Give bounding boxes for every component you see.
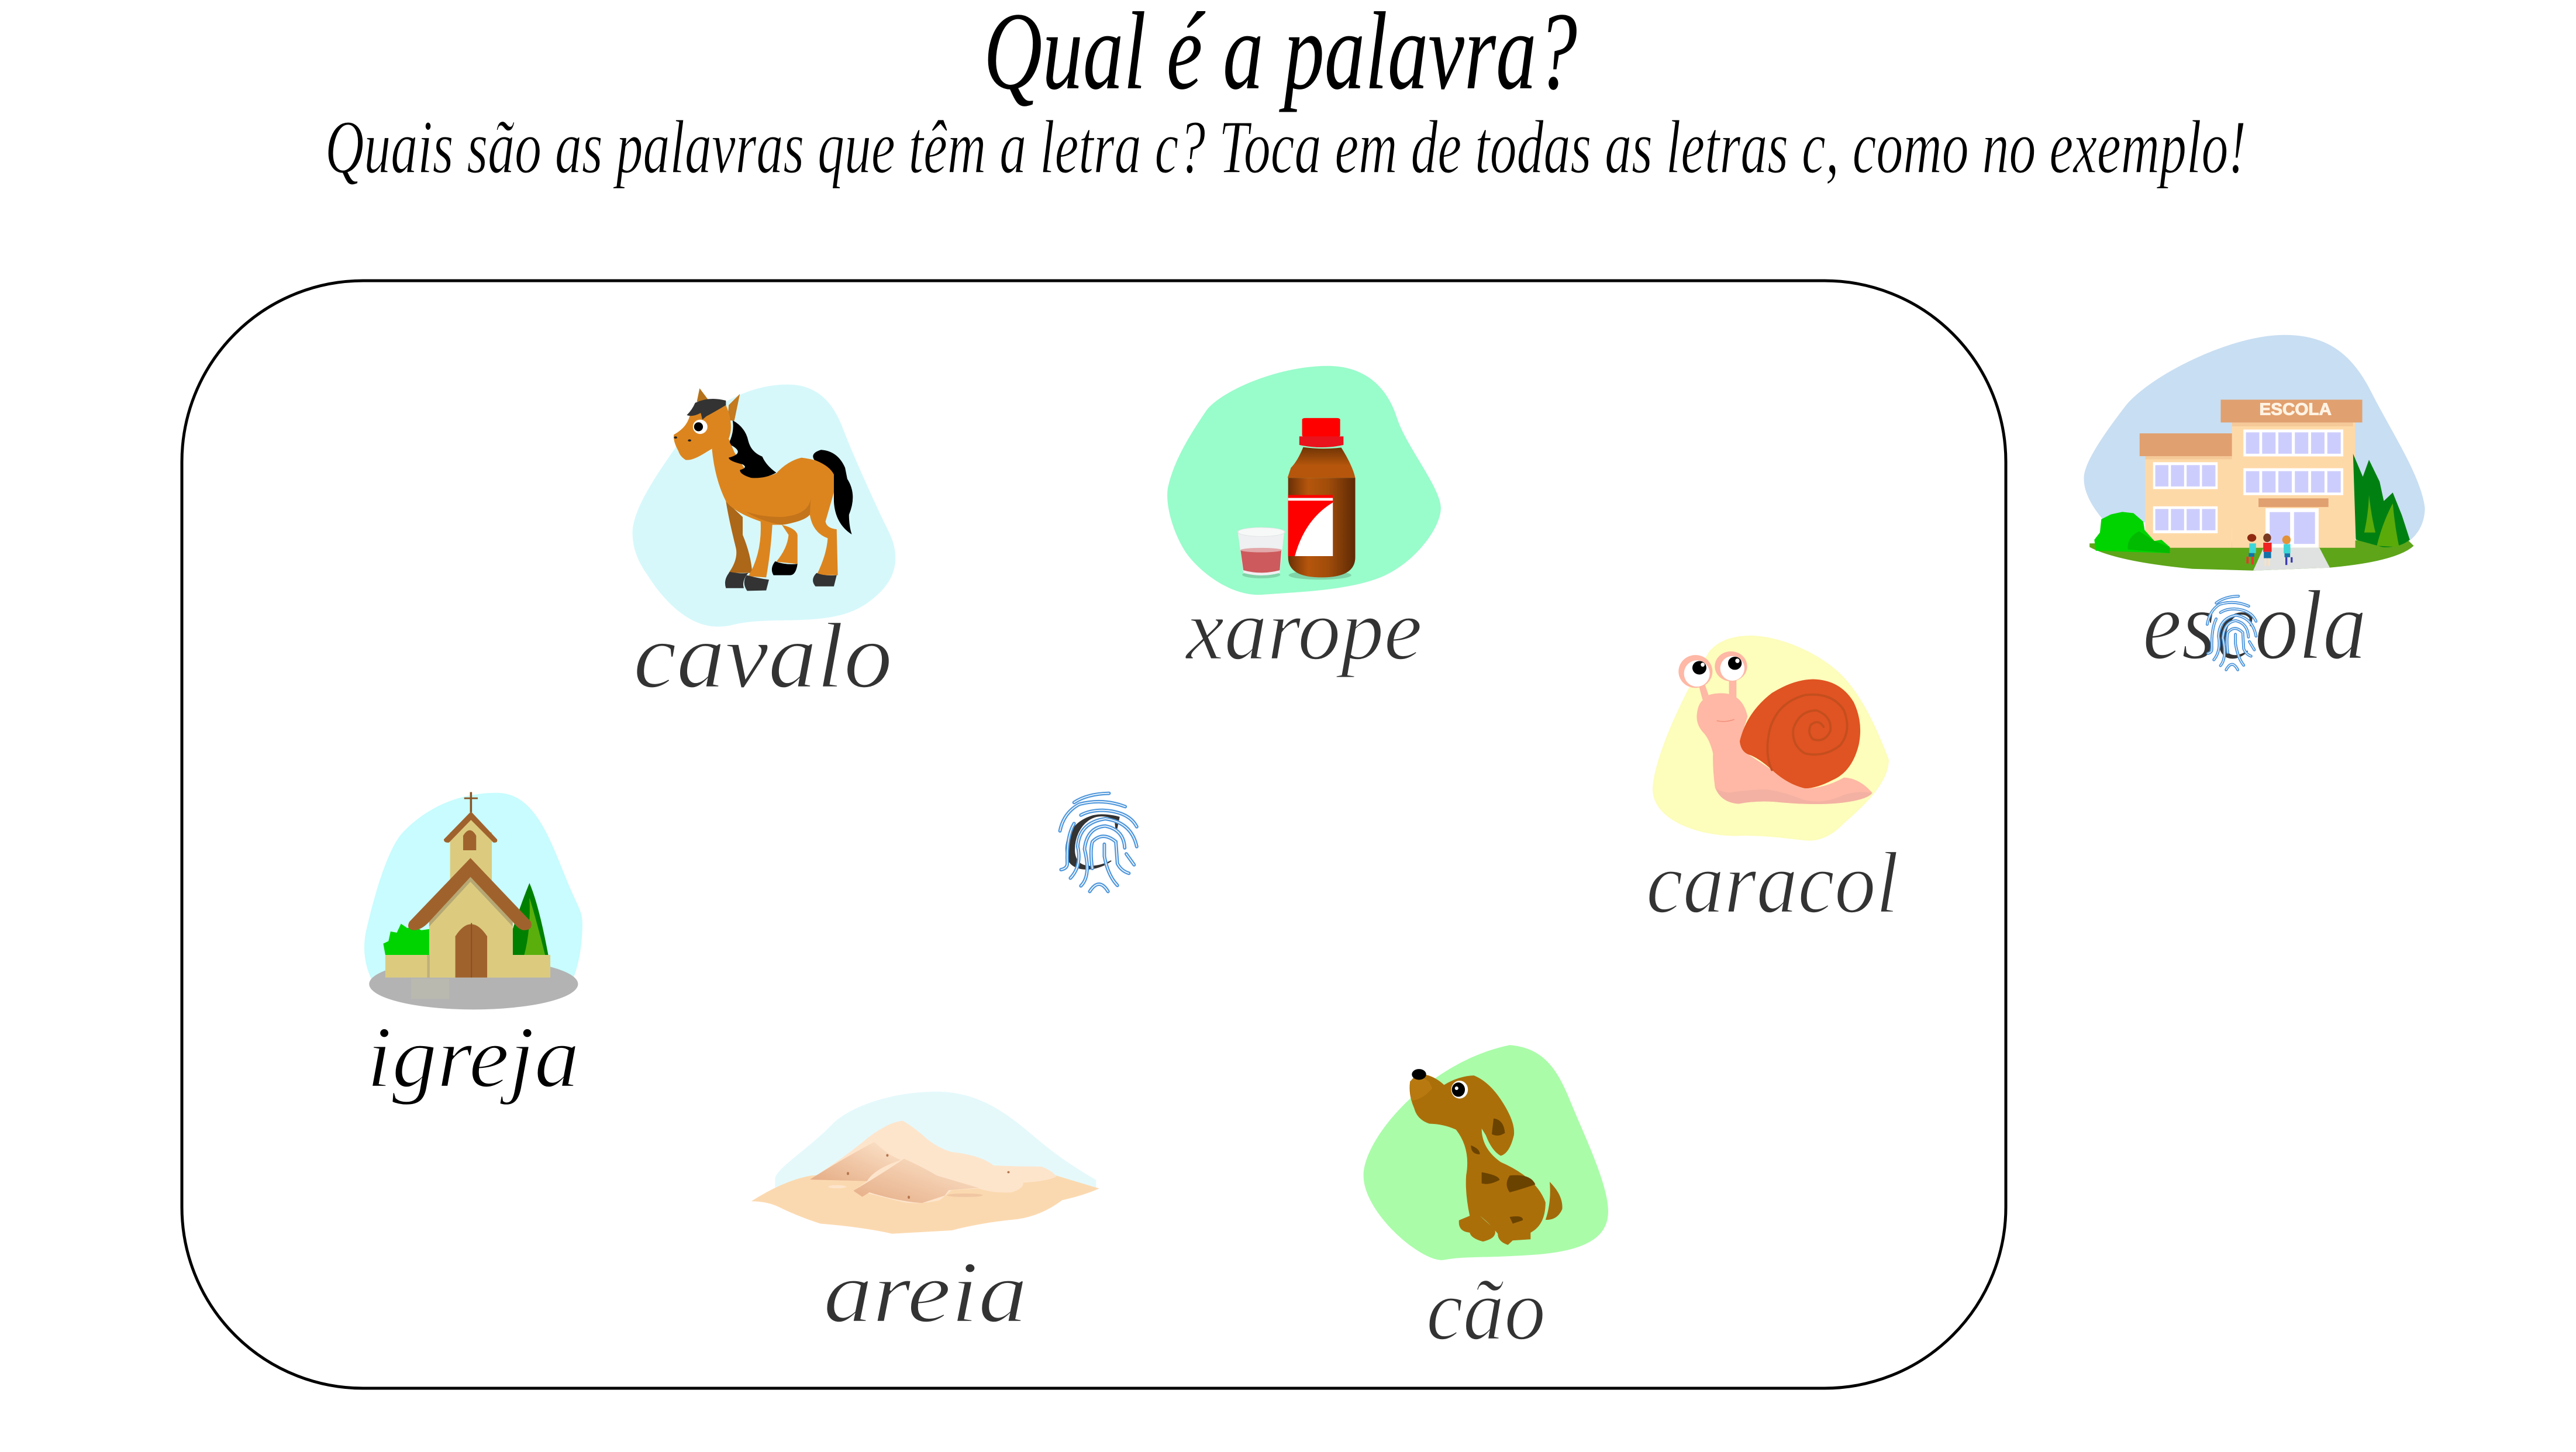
icon: fingerprint: [1060, 794, 1137, 891]
icon: sand pile: [751, 1120, 1099, 1234]
areia background blob: [775, 1092, 1096, 1189]
item: xarope picture: [1167, 366, 1441, 595]
icon: snail: [1678, 651, 1872, 804]
letter c: c: [1060, 763, 1123, 896]
word: igreja: igreja: [367, 1009, 580, 1106]
cão background blob: [1364, 1045, 1608, 1260]
example: word escola with fingerprint: [2143, 570, 2367, 680]
icon: school building: [2089, 399, 2414, 571]
letter c with fingerprint: [1060, 763, 1137, 896]
word: cão: cão: [1426, 1261, 1546, 1358]
caracol background blob: [1653, 636, 1889, 841]
item: caracol picture: [1653, 636, 1889, 841]
escola background blob: [2084, 335, 2425, 542]
item: areia picture: [751, 1092, 1099, 1234]
igreja background blob: [364, 793, 582, 980]
icon: fingerprint on c: [2207, 596, 2256, 670]
item: cão picture: [1364, 1045, 1608, 1260]
word: areia: areia: [823, 1244, 1027, 1341]
example: escola picture: [2084, 335, 2425, 571]
xarope background blob: [1167, 366, 1441, 595]
icon: dog: [1410, 1069, 1563, 1245]
children: [2247, 533, 2292, 566]
item: cavalo picture: [633, 385, 895, 627]
icon: syrup bottle and cup: [1238, 418, 1355, 580]
panel: word board: [182, 281, 2006, 1388]
item: igreja picture: [364, 792, 582, 1009]
word: xarope: xarope: [1185, 581, 1422, 678]
word: caracol: caracol: [1646, 834, 1899, 932]
word: cavalo: cavalo: [633, 603, 892, 708]
icon: horse: [674, 388, 853, 591]
word: escola: escola: [2143, 570, 2367, 680]
icon: church: [369, 792, 578, 1009]
cavalo background blob: [633, 385, 895, 627]
school sign text: ESCOLA: [2260, 400, 2332, 419]
